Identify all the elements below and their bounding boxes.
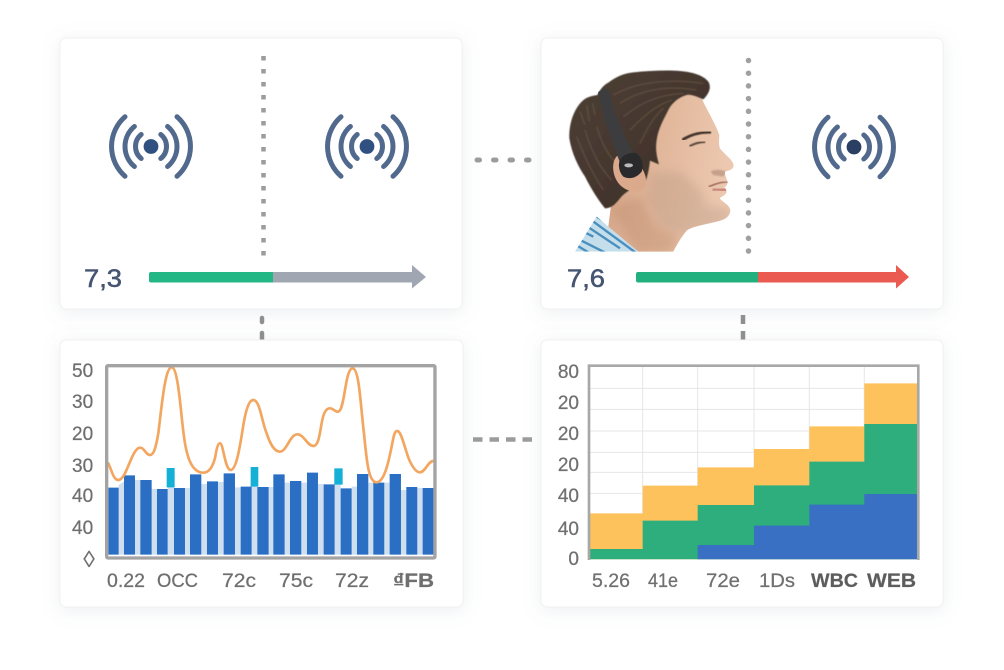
blue bars [108, 473, 434, 555]
y axis labels: 0 [568, 549, 579, 570]
x axis labels: WEB [867, 571, 916, 592]
hair strands [577, 81, 703, 190]
stubble shading [610, 170, 732, 253]
y axis labels: ◊ [83, 546, 95, 572]
y axis labels: 40 [558, 486, 579, 507]
y axis labels [558, 362, 579, 570]
x axis labels: 72e [706, 571, 740, 592]
chart: bars and line [107, 366, 435, 558]
y axis labels: 40 [558, 519, 579, 540]
shirt [575, 216, 638, 252]
x axis labels [107, 571, 434, 592]
y axis labels: 20 [558, 455, 579, 476]
ear [613, 155, 646, 192]
progress arrow: green and red [636, 265, 909, 288]
panel: top left signal comparison [60, 38, 462, 309]
x axis labels: 72z [335, 571, 369, 592]
hair [569, 71, 710, 208]
connector: right vertical [741, 315, 745, 340]
light background bars [119, 480, 423, 555]
panel: top right person and signal [541, 38, 943, 309]
x axis labels: 41e [648, 571, 678, 592]
x axis labels: 75c [279, 571, 313, 592]
y axis labels: 40 [72, 486, 93, 507]
y axis labels: 30 [72, 392, 93, 413]
x axis labels: OCC [157, 571, 198, 592]
y axis labels [72, 361, 95, 572]
y axis labels: 50 [72, 361, 93, 382]
yellow series [590, 383, 918, 559]
progress arrow: green and grey [149, 265, 426, 288]
chart: stacked steps [589, 366, 918, 560]
y axis labels: 20 [558, 393, 579, 414]
connector: bottom horizontal [473, 437, 533, 442]
y axis labels: 30 [72, 456, 93, 477]
value label: 7,3 [84, 265, 122, 293]
x axis labels [592, 571, 916, 592]
neck and face [608, 90, 734, 252]
y axis labels: 20 [558, 424, 579, 445]
value label: 7,6 [567, 265, 605, 293]
y axis labels: 40 [72, 518, 93, 539]
eyebrow, eye and lips [683, 132, 727, 191]
divider: dotted vertical [746, 60, 751, 252]
icon: signal right [328, 117, 406, 176]
chart frame [589, 366, 918, 560]
person: profile with headset [569, 71, 734, 253]
x axis labels: 1Ds [759, 571, 795, 592]
divider: dotted vertical [261, 56, 266, 256]
x axis labels: WBC [811, 571, 858, 592]
panel: bar and line chart [60, 340, 463, 607]
earbud [619, 153, 643, 178]
cyan accent bars [167, 467, 343, 487]
blue series [698, 494, 918, 559]
icon: signal left [112, 117, 190, 176]
y axis labels: 20 [72, 424, 93, 445]
x axis labels: 0.22 [107, 571, 145, 592]
chart frame [107, 366, 435, 558]
connector: top horizontal [477, 158, 531, 162]
grid [590, 366, 918, 559]
icon: signal right [815, 117, 893, 177]
headband [598, 89, 633, 163]
x axis labels: 72c [222, 571, 256, 592]
connector: left vertical [260, 318, 264, 340]
x axis labels: 5.26 [592, 571, 630, 592]
orange trend line [108, 367, 433, 482]
y axis labels: 80 [558, 362, 579, 383]
green series [590, 424, 918, 559]
panel: stacked step chart [541, 340, 943, 607]
x axis labels: ₫FB [393, 571, 434, 592]
